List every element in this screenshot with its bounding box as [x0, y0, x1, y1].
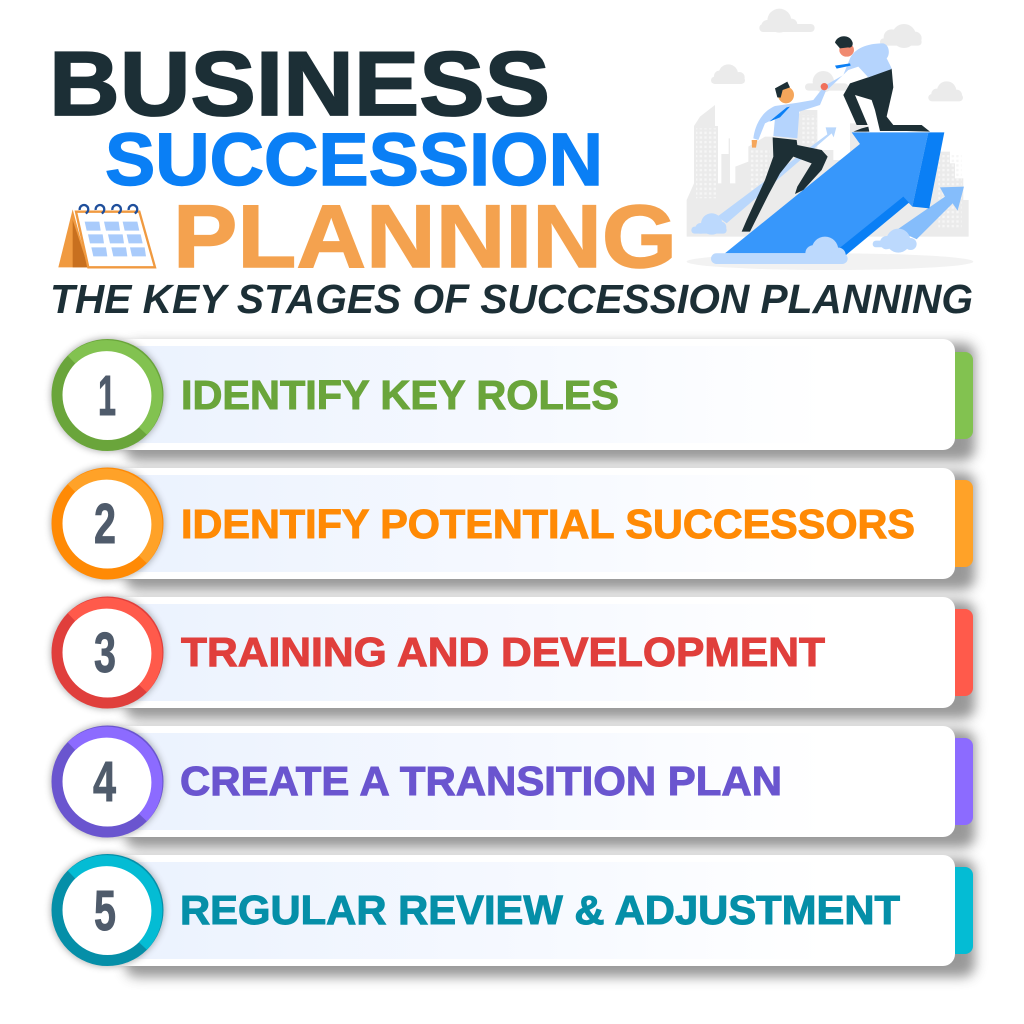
- label 5: REGULAR REVIEW & ADJUSTMENT: [180, 887, 900, 933]
- number 1: 1: [98, 364, 116, 428]
- subtitle: THE KEY STAGES OF SUCCESSION PLANNING: [50, 276, 973, 322]
- ring 2: [57, 473, 158, 574]
- label 1: IDENTIFY KEY ROLES: [181, 372, 619, 418]
- label 4: CREATE A TRANSITION PLAN: [180, 758, 782, 804]
- number 5: 5: [94, 879, 116, 943]
- man climbing: [742, 82, 828, 232]
- ring 3: [57, 602, 158, 703]
- ring 1: [57, 344, 158, 446]
- stage 3 panel: [50, 596, 975, 719]
- big arrow: [725, 132, 928, 253]
- ring 4: [57, 731, 158, 832]
- number 4: 4: [93, 750, 116, 814]
- title: Succession: SUCCESSION: [105, 118, 603, 201]
- illustration: two businessmen climbing an arrow: [687, 9, 973, 270]
- city skyline: [687, 105, 969, 237]
- title: Planning: PLANNING: [173, 186, 677, 286]
- stage 2 panel: [50, 466, 975, 590]
- stage 1 panel: [50, 338, 975, 461]
- small right arrow: [897, 187, 964, 239]
- stage 5 panel: [50, 853, 975, 977]
- icon: calendar: [58, 205, 155, 267]
- title: Business: BUSINESS: [49, 34, 550, 135]
- ring 5: [57, 860, 158, 960]
- back arrow light: [717, 127, 836, 223]
- number 2: 2: [94, 492, 116, 556]
- gray clouds: [711, 9, 963, 101]
- stage 4 panel: [50, 724, 975, 848]
- label 2: IDENTIFY POTENTIAL SUCCESSORS: [181, 501, 915, 547]
- light blue clouds: [691, 213, 917, 264]
- number 3: 3: [94, 621, 116, 685]
- man helping: [821, 36, 930, 132]
- label 3: TRAINING AND DEVELOPMENT: [181, 629, 825, 675]
